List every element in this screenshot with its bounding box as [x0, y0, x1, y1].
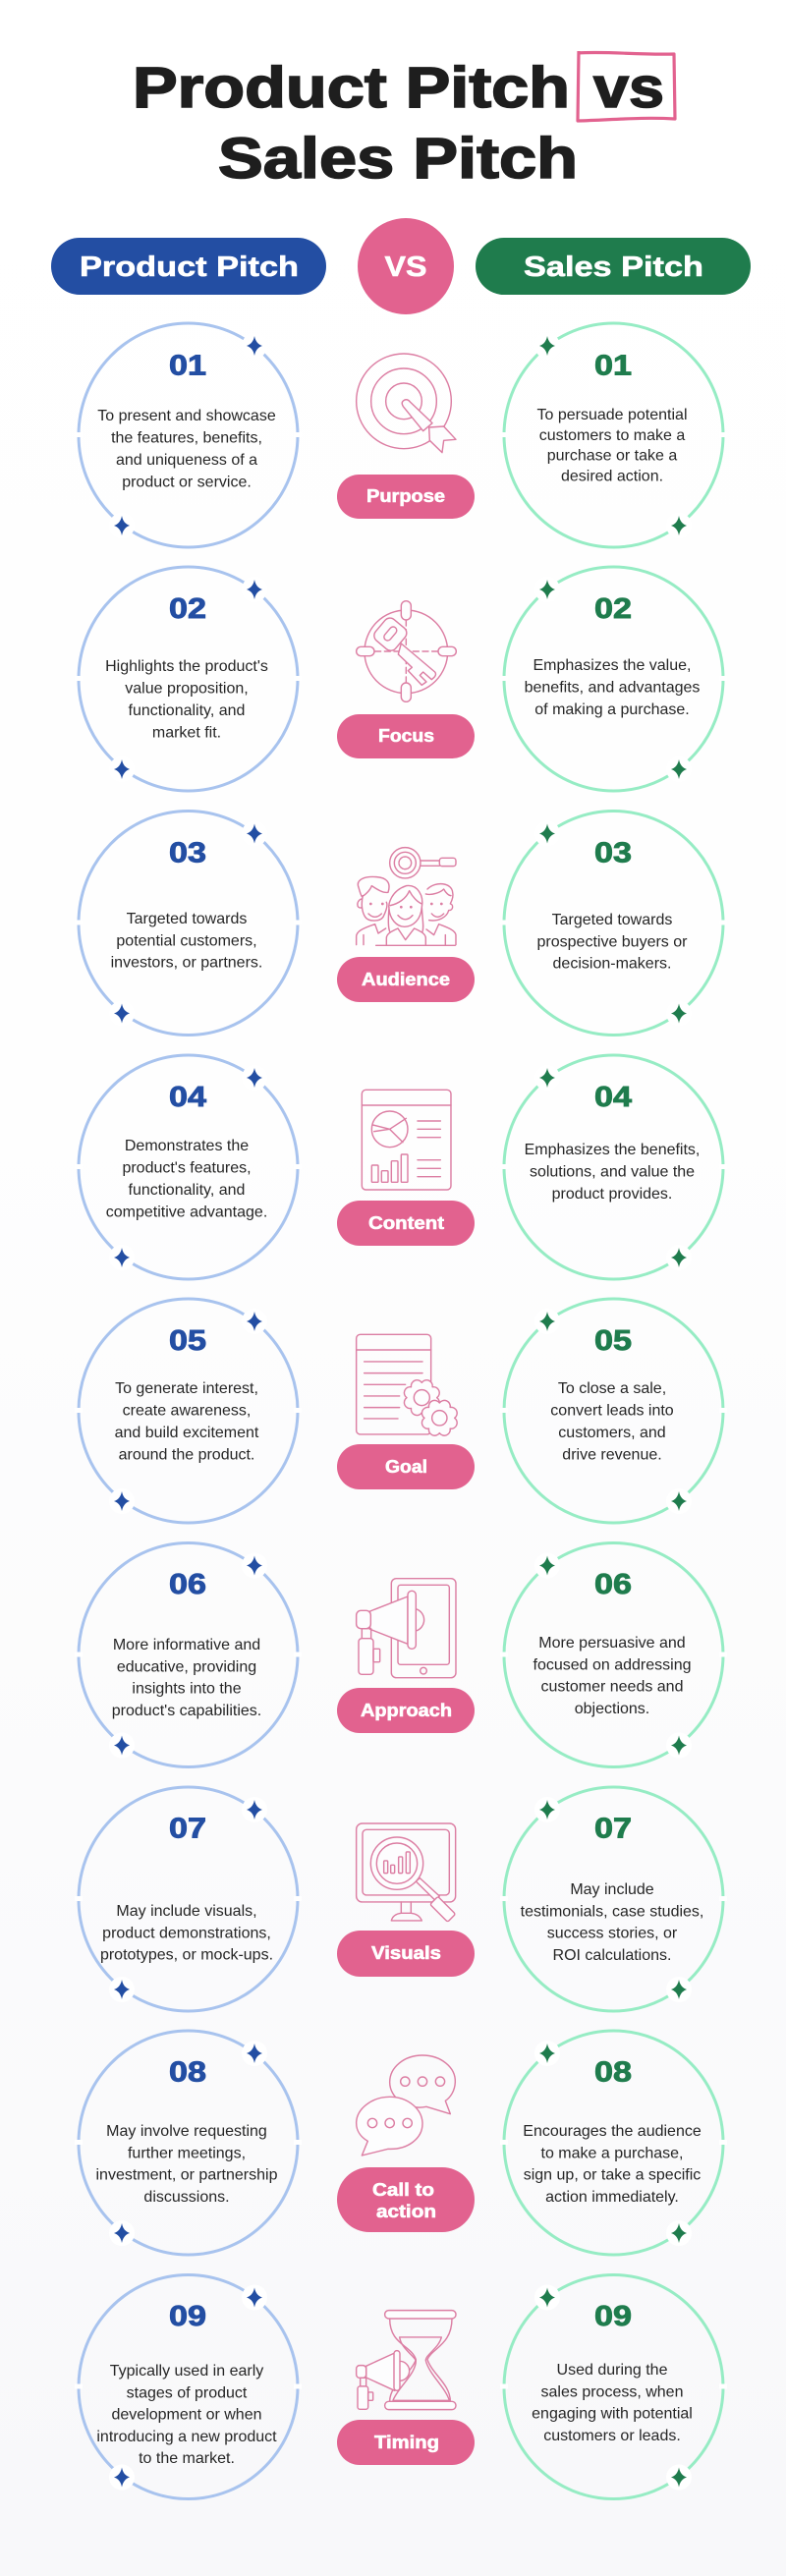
- left panel 01: [75, 323, 302, 547]
- left panel 09: stages of product: [127, 2384, 248, 2401]
- left panel 07: [75, 1787, 302, 2011]
- left panel 04: Demonstrates the: [125, 1138, 249, 1154]
- label: audience: Audience: [362, 970, 450, 989]
- left panel 01: and uniqueness of a: [116, 452, 257, 469]
- left panel 09: Typically used in early: [110, 2363, 263, 2380]
- icon: hourglass and megaphone: [357, 2311, 456, 2410]
- right panel 01: [500, 323, 727, 547]
- right panel 01: purchase or take a: [547, 448, 677, 465]
- label: timing: Timing: [374, 2433, 439, 2452]
- left panel 04: competitive advantage.: [106, 1204, 267, 1220]
- left panel 07: 07: [169, 1814, 206, 1845]
- label: purpose: Purpose: [366, 486, 445, 506]
- right panel 03: Targeted towards: [552, 912, 672, 928]
- right panel 05: To close a sale,: [558, 1380, 666, 1397]
- left panel 09: introducing a new product: [96, 2429, 277, 2445]
- left panel 03: [75, 812, 302, 1036]
- right panel 05: drive revenue.: [562, 1446, 662, 1464]
- left panel 02: value proposition,: [125, 680, 249, 698]
- row 5: [75, 1299, 727, 1523]
- right panel 06: More persuasive and: [538, 1635, 686, 1652]
- right panel 06: customer needs and: [541, 1679, 683, 1696]
- right panel 03: decision-makers.: [553, 956, 671, 973]
- right panel 01: To persuade potential: [536, 407, 688, 423]
- left panel 08: [75, 2031, 302, 2255]
- label: approach: Approach: [361, 1701, 452, 1720]
- right panel 07: May include: [570, 1881, 654, 1898]
- right panel 07: [500, 1787, 727, 2011]
- icon: audience and target: [357, 848, 456, 945]
- left panel 08: further meetings,: [128, 2145, 246, 2161]
- left panel 02: Highlights the product's: [105, 658, 268, 675]
- label: visuals: Visuals: [371, 1943, 441, 1963]
- left panel 05: To generate interest,: [115, 1380, 258, 1397]
- right panel 07: 07: [594, 1814, 632, 1845]
- left panel 02: 02: [169, 593, 206, 625]
- right panel 06: 06: [594, 1569, 632, 1600]
- row 1: [75, 323, 727, 547]
- label: call to action: Call to: [372, 2180, 434, 2200]
- right panel 07: testimonials, case studies,: [521, 1903, 703, 1920]
- label: call to action: action: [376, 2202, 436, 2221]
- left panel 01: To present and showcase: [97, 408, 276, 424]
- row 7: [75, 1787, 727, 2011]
- right panel 08: sign up, or take a specific: [524, 2167, 701, 2184]
- row 6: [75, 1542, 727, 1766]
- label: audience: [337, 957, 475, 1002]
- label: timing: [337, 2420, 475, 2465]
- right panel 04: 04: [594, 1082, 632, 1113]
- left panel 05: create awareness,: [123, 1403, 251, 1419]
- right panel 09: customers or leads.: [543, 2428, 681, 2444]
- right panel 02: benefits, and advantages: [525, 680, 700, 696]
- left panel 04: 04: [169, 1082, 206, 1113]
- right panel 06: focused on addressing: [533, 1656, 692, 1673]
- icon: document with gears: [357, 1334, 457, 1435]
- right panel 05: [500, 1299, 727, 1523]
- label: goal: [337, 1444, 475, 1489]
- left panel 02: functionality, and: [129, 702, 245, 719]
- left panel 05: around the product.: [119, 1446, 254, 1464]
- right panel 08: action immediately.: [545, 2189, 679, 2206]
- left panel 04: product's features,: [122, 1159, 252, 1177]
- left panel 07: product demonstrations,: [102, 1925, 271, 1941]
- title: Sales Pitch: [218, 127, 578, 191]
- row 9: [75, 2275, 727, 2499]
- header: sales pitch pill: Sales Pitch: [524, 252, 703, 283]
- label: call to action: [337, 2167, 475, 2232]
- icon: monitor with magnifier: [357, 1823, 456, 1922]
- label: focus: Focus: [378, 726, 434, 746]
- label: approach: [337, 1688, 475, 1733]
- left panel 01: product or service.: [122, 474, 252, 491]
- header: product pitch pill: Product Pitch: [80, 252, 299, 283]
- left panel 03: potential customers,: [116, 932, 257, 949]
- right panel 02: Emphasizes the value,: [533, 657, 691, 674]
- right panel 02: of making a purchase.: [534, 701, 690, 718]
- right panel 08: 08: [594, 2057, 632, 2089]
- icon: target with arrow: [357, 354, 456, 453]
- left panel 03: 03: [169, 837, 206, 868]
- row 4: [75, 1055, 727, 1279]
- right panel 01: 01: [594, 350, 632, 381]
- left panel 09: to the market.: [139, 2450, 235, 2467]
- left panel 06: [75, 1542, 302, 1766]
- row 3: [75, 812, 727, 1036]
- left panel 03: investors, or partners.: [111, 955, 262, 972]
- right panel 01: customers to make a: [539, 427, 685, 444]
- left panel 02: market fit.: [152, 725, 221, 741]
- right panel 06: objections.: [575, 1701, 649, 1717]
- left panel 03: Targeted towards: [127, 911, 247, 927]
- left panel 09: [75, 2275, 302, 2499]
- header: sales pitch pill: [476, 238, 751, 295]
- label: focus: [337, 714, 475, 758]
- left panel 08: investment, or partnership: [96, 2167, 278, 2184]
- right panel 05: 05: [594, 1325, 632, 1357]
- left panel 09: 09: [169, 2301, 206, 2332]
- right panel 08: [500, 2031, 727, 2255]
- label: goal: Goal: [385, 1457, 427, 1477]
- left panel 07: May include visuals,: [116, 1903, 257, 1920]
- right panel 04: solutions, and value the: [530, 1163, 695, 1181]
- right panel 09: Used during the: [557, 2362, 668, 2379]
- left panel 06: educative, providing: [117, 1658, 256, 1675]
- title: [133, 51, 675, 191]
- right panel 02: 02: [594, 593, 632, 625]
- icon: megaphone and tablet: [357, 1579, 456, 1678]
- header: vs circle: VS: [385, 252, 426, 283]
- title: vs: [593, 56, 664, 120]
- right panel 05: convert leads into: [550, 1403, 674, 1419]
- right panel 05: customers, and: [558, 1425, 666, 1441]
- right panel 04: Emphasizes the benefits,: [525, 1142, 700, 1158]
- left panel 08: 08: [169, 2057, 206, 2089]
- right panel 09: 09: [594, 2301, 632, 2332]
- left panel 06: insights into the: [132, 1681, 242, 1698]
- right panel 09: [500, 2275, 727, 2499]
- left panel 05: 05: [169, 1325, 206, 1357]
- icon: report dashboard: [362, 1090, 451, 1190]
- left panel 04: [75, 1055, 302, 1279]
- left panel 08: May involve requesting: [106, 2123, 267, 2140]
- icon: speech bubbles: [357, 2055, 455, 2156]
- left panel 02: [75, 567, 302, 791]
- left panel 01: the features, benefits,: [111, 430, 262, 446]
- right panel 06: [500, 1542, 727, 1766]
- label: visuals: [337, 1931, 475, 1977]
- icon: key in crosshair: [357, 601, 456, 701]
- label: content: [337, 1201, 475, 1246]
- right panel 01: desired action.: [561, 468, 663, 484]
- right panel 08: to make a purchase,: [541, 2145, 683, 2161]
- right panel 03: [500, 812, 727, 1036]
- left panel 08: discussions.: [143, 2189, 230, 2206]
- left panel 01: 01: [169, 350, 206, 381]
- left panel 06: More informative and: [113, 1637, 260, 1653]
- right panel 07: ROI calculations.: [553, 1947, 671, 1964]
- header: product pitch pill: [51, 238, 326, 295]
- right panel 02: [500, 567, 727, 791]
- right panel 03: 03: [594, 837, 632, 868]
- right panel 04: [500, 1055, 727, 1279]
- left panel 09: development or when: [112, 2407, 261, 2424]
- title: Product Pitch: [133, 56, 570, 120]
- left panel 05: [75, 1299, 302, 1523]
- right panel 07: success stories, or: [547, 1926, 678, 1942]
- left panel 05: and build excitement: [115, 1425, 259, 1441]
- right panel 03: prospective buyers or: [537, 933, 688, 950]
- row 2: [75, 567, 727, 791]
- row 8: [75, 2031, 727, 2255]
- left panel 07: prototypes, or mock-ups.: [100, 1947, 273, 1964]
- label: purpose: [337, 475, 475, 519]
- right panel 09: engaging with potential: [532, 2406, 693, 2423]
- left panel 06: 06: [169, 1569, 206, 1600]
- left panel 04: functionality, and: [129, 1182, 245, 1199]
- right panel 09: sales process, when: [541, 2383, 683, 2400]
- label: content: Content: [368, 1213, 444, 1233]
- header: vs circle: [358, 218, 454, 314]
- right panel 08: Encourages the audience: [523, 2123, 702, 2140]
- left panel 06: product's capabilities.: [112, 1703, 261, 1719]
- right panel 04: product provides.: [552, 1186, 672, 1203]
